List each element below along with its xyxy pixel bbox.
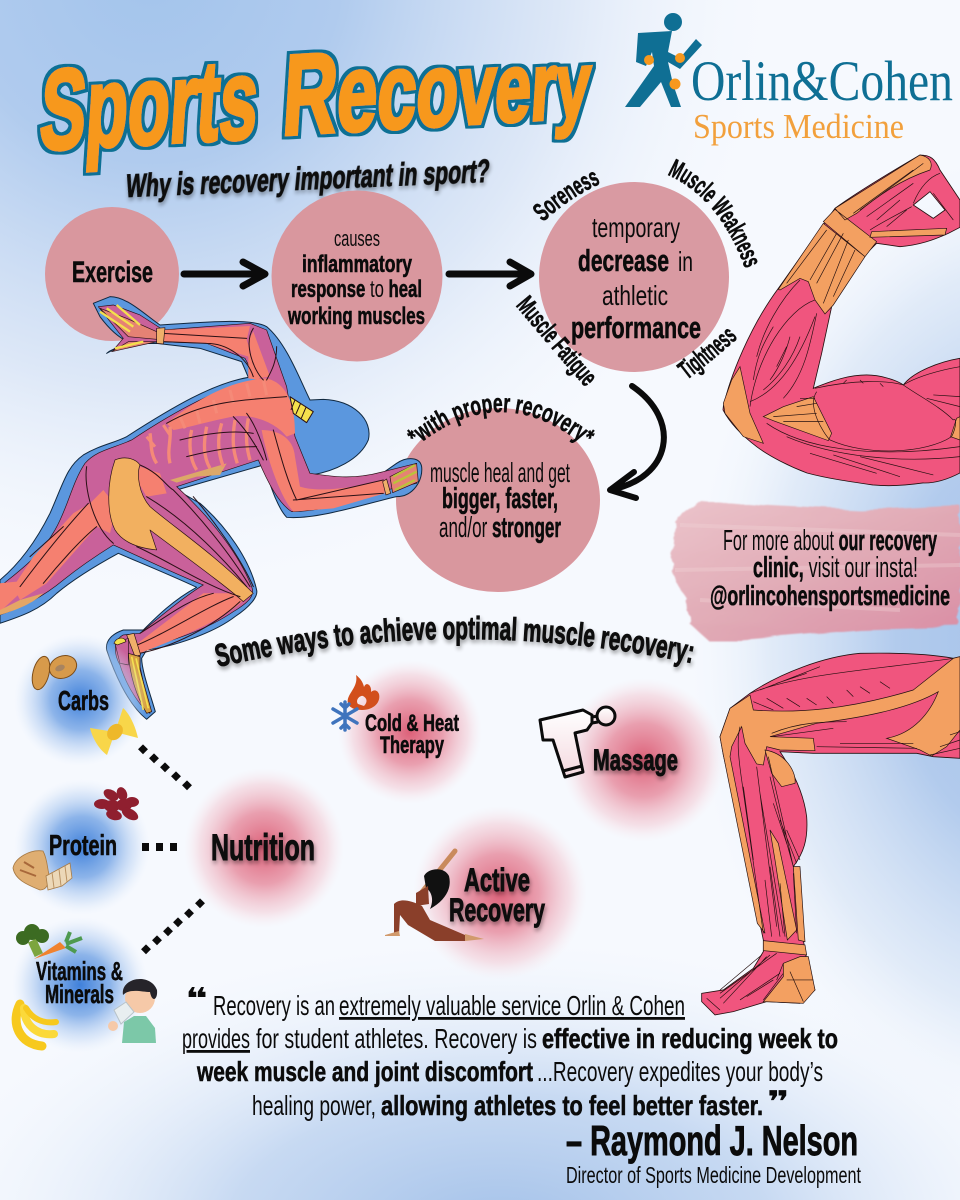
- quote block: for student athletes. Recovery is: [256, 1023, 537, 1054]
- leg muscle fibers: [707, 658, 960, 1010]
- circle: with proper recovery: muscle heal and get: [430, 457, 570, 488]
- leg tan tendons and knee: [720, 657, 960, 933]
- logo: Orlin & Cohen Sports Medicine: [625, 13, 953, 146]
- connector: carbs to nutrition: [138, 744, 192, 790]
- label: tightness: Tightness: [676, 329, 737, 378]
- circle: inflammatory response: working muscles: [287, 303, 425, 330]
- icon: broccoli: [16, 924, 49, 957]
- node: cold and heat therapy: Cold & Heat: [365, 710, 459, 737]
- circle: temporary decrease in performance: performance: [571, 310, 701, 345]
- arrow: inflammation to decrease: [449, 262, 531, 286]
- node: cold and heat therapy: [333, 660, 482, 804]
- node: vitamins and minerals: [12, 917, 157, 1053]
- node: active recovery: Active: [464, 862, 530, 898]
- runner tan wrist bands: [127, 328, 391, 657]
- illustration: sprinter muscular anatomy: [0, 297, 422, 719]
- arrow: curved to recovery: [610, 386, 664, 498]
- circle: with proper recovery: and/or stronger: [439, 512, 561, 544]
- circle: inflammatory response: causes: [334, 226, 380, 251]
- quote block: Recovery is an: [213, 990, 335, 1021]
- circle: inflammatory response: inflammatory: [302, 251, 412, 278]
- title: Sports Recovery: [36, 14, 595, 175]
- node: protein: [13, 779, 150, 915]
- icon: farfalle pasta: [90, 708, 138, 755]
- icon: flame: [348, 675, 379, 710]
- heading: ways to achieve optimal recovery: Some ways to achieve optimal muscle recovery:: [214, 615, 697, 672]
- arm muscle outline: [723, 155, 960, 486]
- arrow: exercise to inflammation: [184, 262, 265, 286]
- quote block: [182, 982, 838, 1121]
- circle: exercise: Exercise: [72, 256, 153, 289]
- circle: with proper recovery: [396, 398, 600, 592]
- label: muscle fatigue: Muscle Fatigue: [516, 294, 594, 386]
- icon: running figure: [625, 13, 702, 107]
- node: nutrition: [184, 768, 344, 928]
- icon: carrot: [34, 932, 82, 959]
- title: Sports Recovery: Sports: [36, 35, 263, 175]
- circle: exercise: [45, 207, 179, 341]
- runner salmon muscles: [163, 326, 270, 380]
- runner blue silhouette: [0, 297, 422, 719]
- circle: temporary decrease in performance: temporary: [592, 212, 680, 243]
- node: nutrition: Nutrition: [211, 827, 315, 868]
- quote block: allowing athletes to feel better faster.: [381, 1090, 763, 1121]
- icon: massage gun: [540, 707, 615, 777]
- node: cold and heat therapy: Therapy: [380, 732, 444, 759]
- circle: temporary decrease in performance: athletic: [602, 280, 668, 311]
- quote block: effective in reducing week to: [542, 1023, 838, 1054]
- quote block: extremely valuable service Orlin & Cohen: [339, 990, 685, 1021]
- node: active recovery: [385, 806, 587, 980]
- icon: bagels: [29, 652, 80, 691]
- quote block: provides: [182, 1023, 250, 1054]
- circle: inflammatory response: [272, 190, 442, 362]
- leg muscle outline: [702, 653, 960, 1015]
- icon: snowflake: [333, 702, 357, 730]
- illustration: flexed arm muscles: [723, 155, 960, 486]
- circle: with proper recovery: *with proper recovery*: [406, 398, 595, 443]
- node: protein: Protein: [49, 830, 117, 862]
- label: muscle weakness: Muscle Weakness: [668, 158, 758, 268]
- quote block: week muscle and joint discomfort: [196, 1056, 533, 1087]
- icon: kidney beans: [94, 786, 140, 823]
- quote block: healing power,: [252, 1090, 376, 1121]
- runner ribs and muscle lines: [150, 418, 250, 470]
- runner tan hip and thigh tendon: [109, 458, 253, 602]
- illustration: leg muscles: [702, 653, 960, 1015]
- icon: yoga figure: [385, 851, 484, 941]
- connector: protein to nutrition: [142, 843, 177, 851]
- runner yellow spine: [290, 397, 313, 423]
- node: vitamins and minerals: Minerals: [45, 979, 114, 1009]
- node: massage: [540, 678, 725, 842]
- icon: boy drinking: [108, 979, 157, 1043]
- attribution: Raymond J. Nelson: [566, 1117, 861, 1188]
- quote block: ...Recovery expedites your body’s: [537, 1056, 823, 1087]
- arm tan tendons: [723, 155, 960, 443]
- label: soreness: Soreness: [533, 172, 600, 220]
- logo subline: Sports Medicine: [693, 107, 904, 146]
- node: active recovery: Recovery: [449, 892, 545, 928]
- node: carbs: [14, 634, 146, 766]
- runner magenta muscle layer: [0, 305, 417, 713]
- arm muscle fibers: [750, 163, 960, 477]
- callout: recovery clinic brush stroke: [672, 500, 960, 640]
- circle: temporary decrease in performance: in: [678, 246, 693, 277]
- circle: inflammatory response: response to heal: [291, 276, 422, 303]
- heading: why is recovery important: Why is recovery important in sport?: [124, 153, 492, 204]
- closing quote mark: ❞: [767, 1085, 790, 1120]
- title: Sports Recovery: Recovery: [279, 14, 595, 160]
- circle: temporary decrease in performance: decrease: [578, 243, 669, 278]
- node: vitamins and minerals: Vitamins &: [36, 956, 123, 986]
- node: massage: Massage: [593, 744, 678, 777]
- connector: vitamins to nutrition: [141, 898, 205, 954]
- circle: with proper recovery: bigger, faster,: [442, 483, 558, 515]
- icon: grilled chicken: [13, 851, 72, 890]
- circle: temporary decrease in performance: [539, 182, 729, 372]
- node: carbs: Carbs: [58, 685, 109, 716]
- runner hand and foot tendons: [100, 308, 157, 352]
- icon: bananas: [16, 1004, 56, 1046]
- opening quote mark: ❝: [185, 982, 208, 1017]
